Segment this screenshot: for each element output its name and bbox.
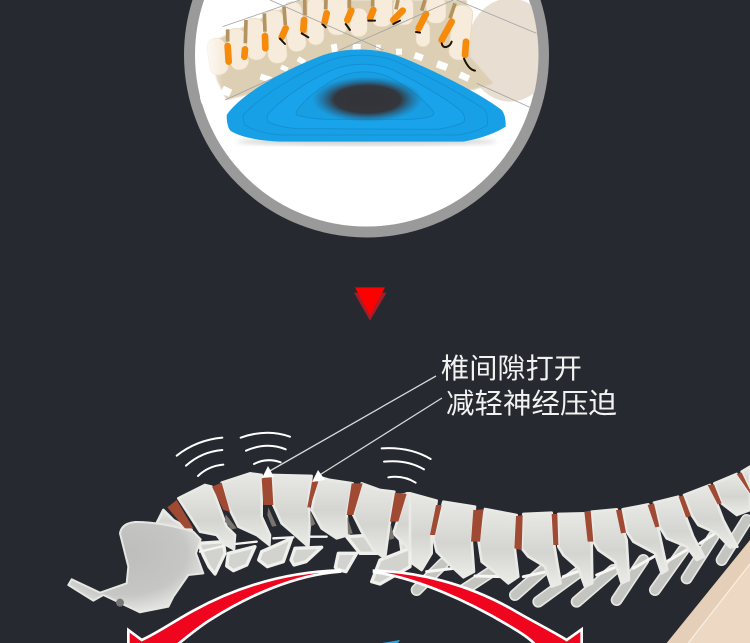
sacrum hole [116, 599, 124, 607]
beige bed [667, 540, 750, 643]
spine right section [400, 467, 750, 602]
rod outlines [417, 520, 747, 602]
dark gaps [225, 507, 394, 540]
lower processes [198, 535, 410, 584]
pointer line 1 [262, 376, 436, 478]
pointer line 2 [312, 398, 442, 482]
hip bone [469, 0, 538, 102]
discs [400, 473, 750, 550]
spinous processes [206, 0, 474, 76]
white disc gaps [220, 44, 470, 97]
left red arrow [128, 570, 340, 643]
guide lines [223, 0, 537, 107]
cushion shadow [237, 138, 497, 146]
vertebra bodies [208, 0, 493, 100]
panel: circular lens with spine and blue cushion [190, 0, 553, 232]
blue sliver at bottom edge [382, 640, 400, 643]
left fade [200, 38, 220, 104]
label: 减轻神经压迫: 减轻神经压迫 [446, 388, 617, 419]
cushion dark centre [312, 77, 422, 122]
joint bands [200, 537, 327, 552]
cushion layer 4 [296, 72, 434, 119]
down arrow [354, 287, 387, 321]
brown joints [228, 0, 455, 43]
cushion layer 2 [243, 55, 488, 135]
right red arrow [374, 571, 582, 643]
blue cushion [227, 49, 506, 142]
cushion outer layer [227, 49, 506, 142]
sound waves [177, 433, 431, 483]
vertebrae [400, 467, 750, 587]
discs [167, 477, 407, 528]
lens ring [190, 0, 544, 232]
spine illustration [68, 376, 750, 643]
dark nerve tips [280, 21, 475, 71]
rod fills [417, 520, 747, 602]
nerve marks [228, 10, 466, 62]
lens content [200, 0, 553, 146]
connector highlights [427, 530, 720, 577]
cushion layer 3 [267, 64, 465, 129]
spine left section [68, 473, 410, 612]
sacrum [68, 522, 203, 612]
vertebrae [157, 473, 410, 558]
label: 椎间隙打开: 椎间隙打开 [441, 353, 582, 384]
